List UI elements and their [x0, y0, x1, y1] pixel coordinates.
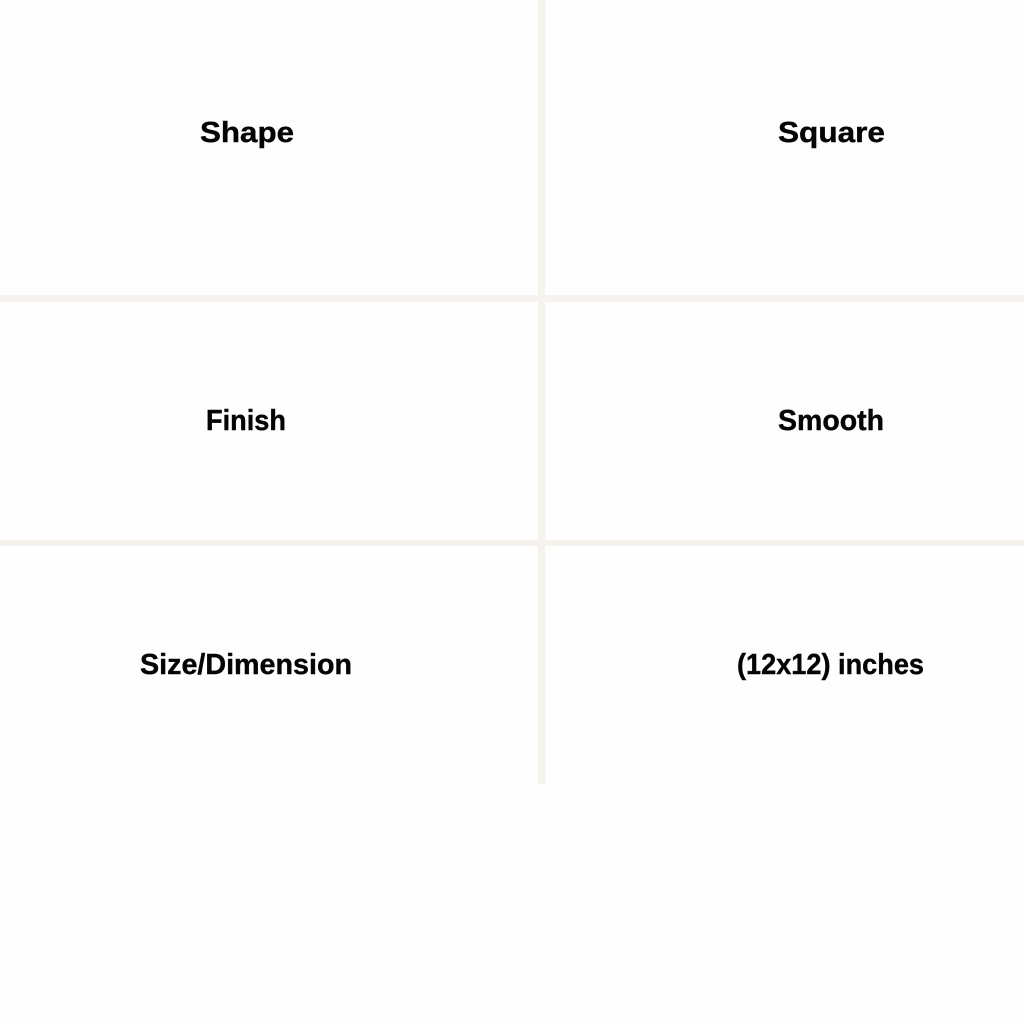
label: Finish: Finish [206, 405, 286, 437]
label: Size/Dimension: Size/Dimension [140, 649, 352, 681]
value: Square: Square [778, 117, 885, 149]
row: shape [200, 117, 885, 149]
row: finish [206, 405, 884, 437]
label: Shape: Shape [200, 117, 294, 149]
value: 12x12 inches: (12x12) inches [737, 649, 924, 681]
row: size [140, 649, 924, 681]
value: Smooth: Smooth [778, 405, 884, 437]
